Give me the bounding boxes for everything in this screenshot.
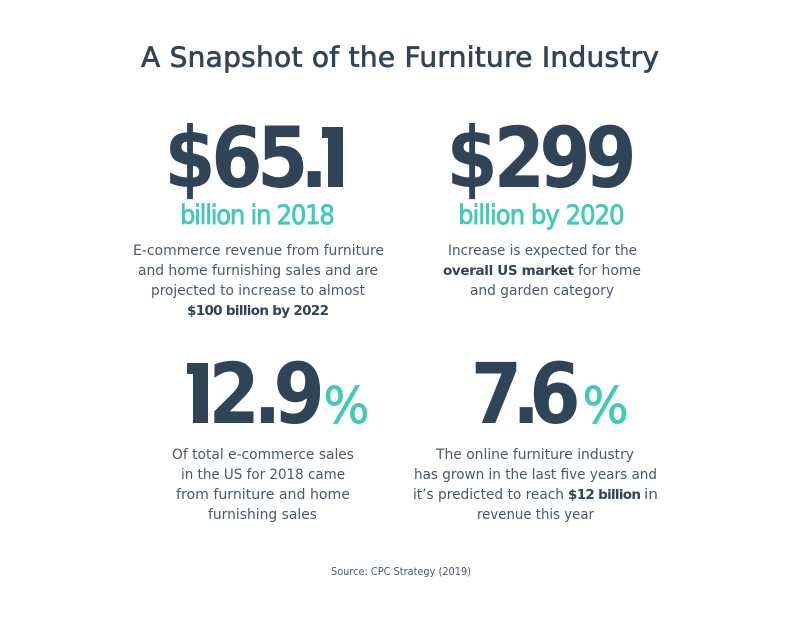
- text block: share of e-commerce: from furniture and home: [176, 487, 350, 503]
- text block: share of e-commerce: furnishing sales: [208, 507, 317, 523]
- text block: e-commerce revenue: [133, 243, 384, 319]
- text block: e-commerce revenue: projected to increase to almost: [151, 283, 365, 299]
- text block: online furniture industry: [413, 447, 658, 523]
- stat: $65.1: $65.: [164, 109, 328, 207]
- text block: overall US market: for home: [578, 263, 641, 279]
- text block: e-commerce revenue: $100 billion by 2022: [187, 303, 329, 319]
- text block: overall US market: overall US market: [443, 263, 575, 279]
- panel: $299 billion by 2020: [443, 109, 641, 299]
- source note: Source: CPC Strategy (2019): [331, 565, 471, 578]
- stat: 12.9: [187, 360, 320, 424]
- text block: online furniture industry: $12 billion: [568, 487, 641, 503]
- text block: share of e-commerce: Of total e-commerce sales: [172, 447, 354, 463]
- subheading: billion by 2020: billion by 2020: [458, 200, 625, 231]
- text block: online furniture industry: The online furniture industry: [435, 447, 634, 463]
- stat: $65.1: 1: [308, 109, 359, 207]
- panel: 7.6%: [413, 345, 658, 523]
- percent sign: %: [324, 377, 370, 435]
- title: A Snapshot of the Furniture Industry: [141, 40, 659, 74]
- text block: online furniture industry: in: [644, 487, 658, 503]
- text block: e-commerce revenue: and home furnishing sales and are: [138, 263, 378, 279]
- stat: 7.6: 7.6: [471, 345, 581, 443]
- panel: $65.1 billion in 2018: [133, 109, 384, 319]
- text block: overall US market: [443, 243, 641, 299]
- percent sign: %: [582, 377, 628, 435]
- stat: 12.9: 1: [173, 345, 224, 443]
- text block: overall US market: and garden category: [470, 283, 614, 299]
- stat: $299: $299: [446, 109, 637, 207]
- panel: 12.9%: [172, 360, 368, 522]
- text block: e-commerce revenue: E-commerce revenue from furniture: [133, 243, 384, 259]
- subheading: billion in 2018: billion in 2018: [180, 200, 335, 231]
- stat: 12.9: 2.9: [209, 345, 325, 443]
- text block: share of e-commerce: [172, 447, 354, 523]
- text block: share of e-commerce: in the US for 2018 came: [181, 467, 345, 483]
- text block: online furniture industry: has grown in the last five years and: [414, 467, 657, 483]
- text block: online furniture industry: revenue this year: [477, 507, 594, 523]
- text block: overall US market: Increase is expected for the: [448, 243, 637, 259]
- text block: online furniture industry: it’s predicted to reach: [413, 487, 564, 503]
